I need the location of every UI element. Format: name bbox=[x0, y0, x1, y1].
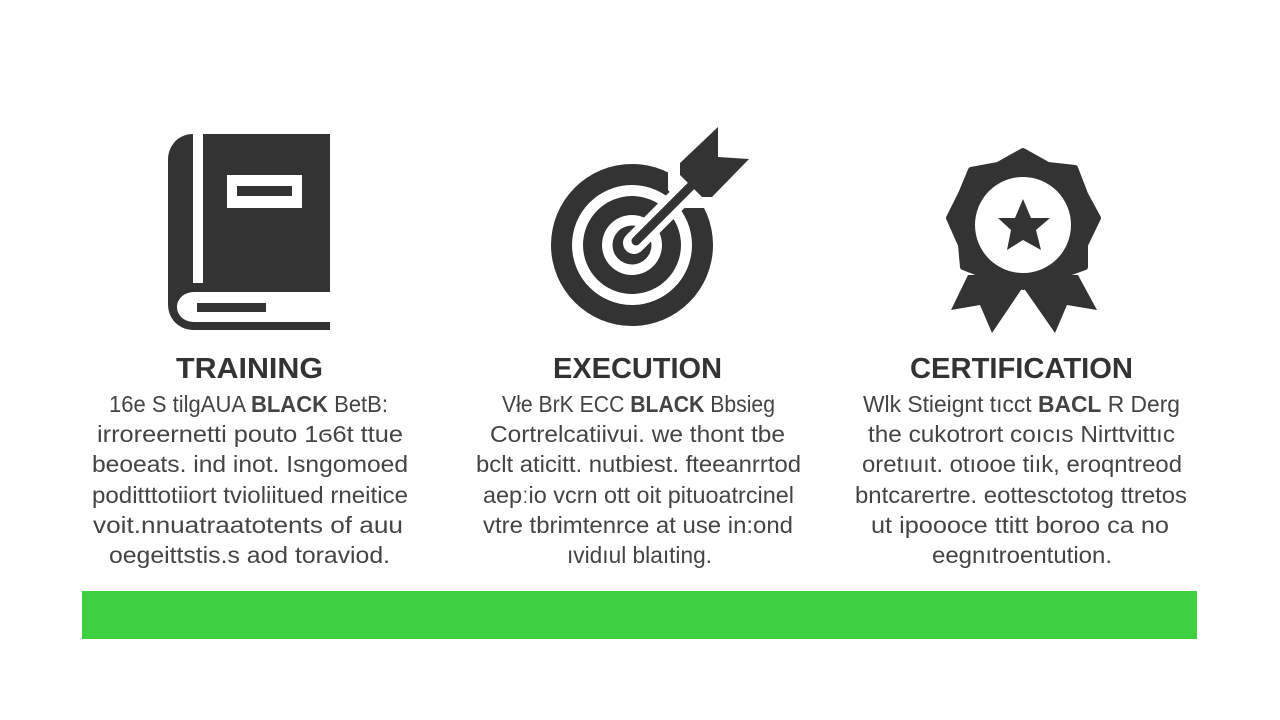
icon: award badge bbox=[949, 151, 1098, 333]
text block: certification description: Wlk Stieignt tıcct BACL R Derg bbox=[863, 391, 1180, 417]
text block: execution description: bclt aticitt. nutbiest. fteeanrrtod bbox=[476, 451, 801, 477]
text block: execution description: aepːio vcrn ott oit pituoatrcinel bbox=[483, 482, 794, 508]
heading: certification: CERTIFICATION bbox=[910, 353, 1133, 385]
text block: training description bbox=[92, 391, 408, 568]
text block: execution description: Cortrelcatiivui. we thont tbe bbox=[490, 421, 785, 447]
text block: training description: irroreernetti pouto 1ϭ6t ttue bbox=[97, 421, 403, 447]
text block: certification description: eegnıtroentution. bbox=[932, 542, 1112, 568]
text block: execution description: ıvidıul blaıting. bbox=[567, 542, 712, 568]
text block: certification description: bntcarertre. eottesctotog ttretos bbox=[855, 482, 1187, 508]
text block: training description: poditttotiiort tvioliitued rneitice bbox=[92, 482, 408, 508]
text block: certification description: the cukotrort coıcıs Nirttvittıc bbox=[868, 421, 1175, 447]
column: execution bbox=[476, 353, 801, 568]
heading: execution: EXECUTION bbox=[553, 353, 722, 385]
column: training bbox=[92, 353, 408, 568]
text block: training description: 16e S tilgAUA BLACK BetB: bbox=[109, 391, 388, 417]
text block: certification description: ut ipoooce ttitt boroo ca no bbox=[871, 512, 1169, 538]
text block: training description: oegeittstis.s aod toraviod. bbox=[109, 542, 390, 568]
text block: training description: beoeats. ind inot. Isngomoed bbox=[92, 451, 408, 477]
icon: target with arrow bbox=[551, 127, 760, 326]
green footer bar bbox=[82, 591, 1197, 639]
text block: execution description: vtre tbrimtenrce at use in:ond bbox=[483, 512, 793, 538]
text block: execution description: Vłe BrK ECC BLACK Bbsieg bbox=[502, 391, 775, 417]
heading: training: TRAINING bbox=[176, 353, 323, 385]
column: certification bbox=[855, 353, 1187, 568]
text block: certification description bbox=[855, 391, 1187, 568]
text block: certification description: oretıuıt. otıooe tiık, eroqntreod bbox=[862, 451, 1182, 477]
icon: book bbox=[168, 134, 330, 330]
text block: training description: voit.nnuatraatotents of auu bbox=[93, 512, 403, 538]
text block: execution description bbox=[476, 391, 801, 568]
